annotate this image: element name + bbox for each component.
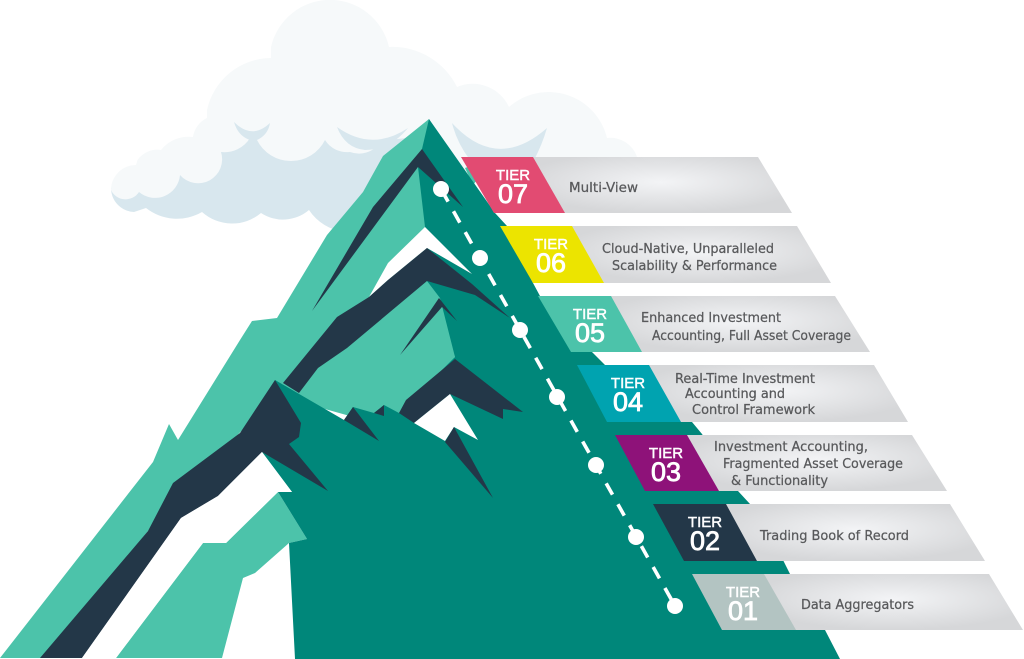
tier 02 band: 02 (690, 526, 720, 556)
mountain: lower right navy ridge (399, 359, 523, 423)
mountain: navy notch one (344, 407, 379, 441)
tier 02 band: Trading Book of Record (759, 529, 909, 544)
mountain (0, 119, 840, 659)
tier 05 band: Enhanced Investment (641, 311, 781, 326)
tier 06 band: 06 (536, 248, 566, 278)
mountain: navy lower ridge (40, 380, 328, 658)
tier 01 band (692, 574, 1023, 630)
tier 06 band: TIER (534, 236, 568, 253)
tier 06 band: Scalability & Performance (612, 259, 777, 274)
tier 06 band: Cloud-Native, Unparalleled (602, 242, 774, 257)
mountain: navy notch two (374, 405, 384, 416)
cloud (111, 0, 637, 232)
tier 05 band: 05 (575, 318, 605, 348)
tier 07 band (461, 157, 792, 213)
tier 07 band: TIER (496, 167, 530, 184)
tier 03 band: TIER (649, 445, 683, 462)
cloud: crescent shadows (234, 122, 547, 160)
tier 02 band: TIER (688, 514, 722, 531)
mountain: light back ridge (0, 119, 455, 658)
tier 07 band: 07 (498, 179, 528, 209)
cloud: light body (111, 0, 637, 199)
tier 01 band: TIER (726, 584, 760, 601)
tier 03 band: Investment Accounting, (714, 440, 868, 455)
tier 04 band: Real-Time Investment (675, 372, 815, 387)
tier 01 band: 01 (728, 596, 758, 626)
dashed climbing path (433, 181, 683, 614)
mountain: snow patch upper (369, 227, 472, 297)
mountain: dark teal main face (262, 119, 840, 659)
tier 04 band: Control Framework (692, 403, 815, 418)
tier 06 band (500, 226, 831, 283)
tier 07 band: Multi-View (569, 181, 638, 196)
mountain: top navy crack (312, 149, 463, 311)
tier 04 band (577, 365, 908, 422)
mountain: small light patch by tier 07 (465, 166, 477, 185)
mountain: light lower left slope (116, 492, 307, 658)
tier 03 band (615, 435, 947, 491)
tier 04 band: TIER (611, 375, 645, 392)
tier 02 band (653, 504, 985, 561)
tier 01 band: Data Aggregators (801, 598, 914, 613)
tier 05 band (538, 296, 870, 352)
tier 04 band: 04 (613, 387, 643, 417)
mountain: navy upper ridge (283, 248, 510, 393)
tier 04 band: Accounting and (685, 387, 785, 402)
mountain: white gap (82, 452, 292, 658)
tier 05 band: TIER (573, 306, 607, 323)
mountain: small crack (400, 298, 457, 355)
tier 03 band: 03 (651, 457, 681, 487)
mountain: snow patch lower (414, 394, 478, 441)
tier 05 band: Accounting, Full Asset Coverage (652, 329, 851, 344)
cloud: shaded underside (111, 120, 420, 232)
tier 03 band: Fragmented Asset Coverage (723, 457, 903, 472)
mountain: navy crack lower right (445, 427, 493, 498)
tier 03 band: & Functionality (731, 474, 828, 489)
